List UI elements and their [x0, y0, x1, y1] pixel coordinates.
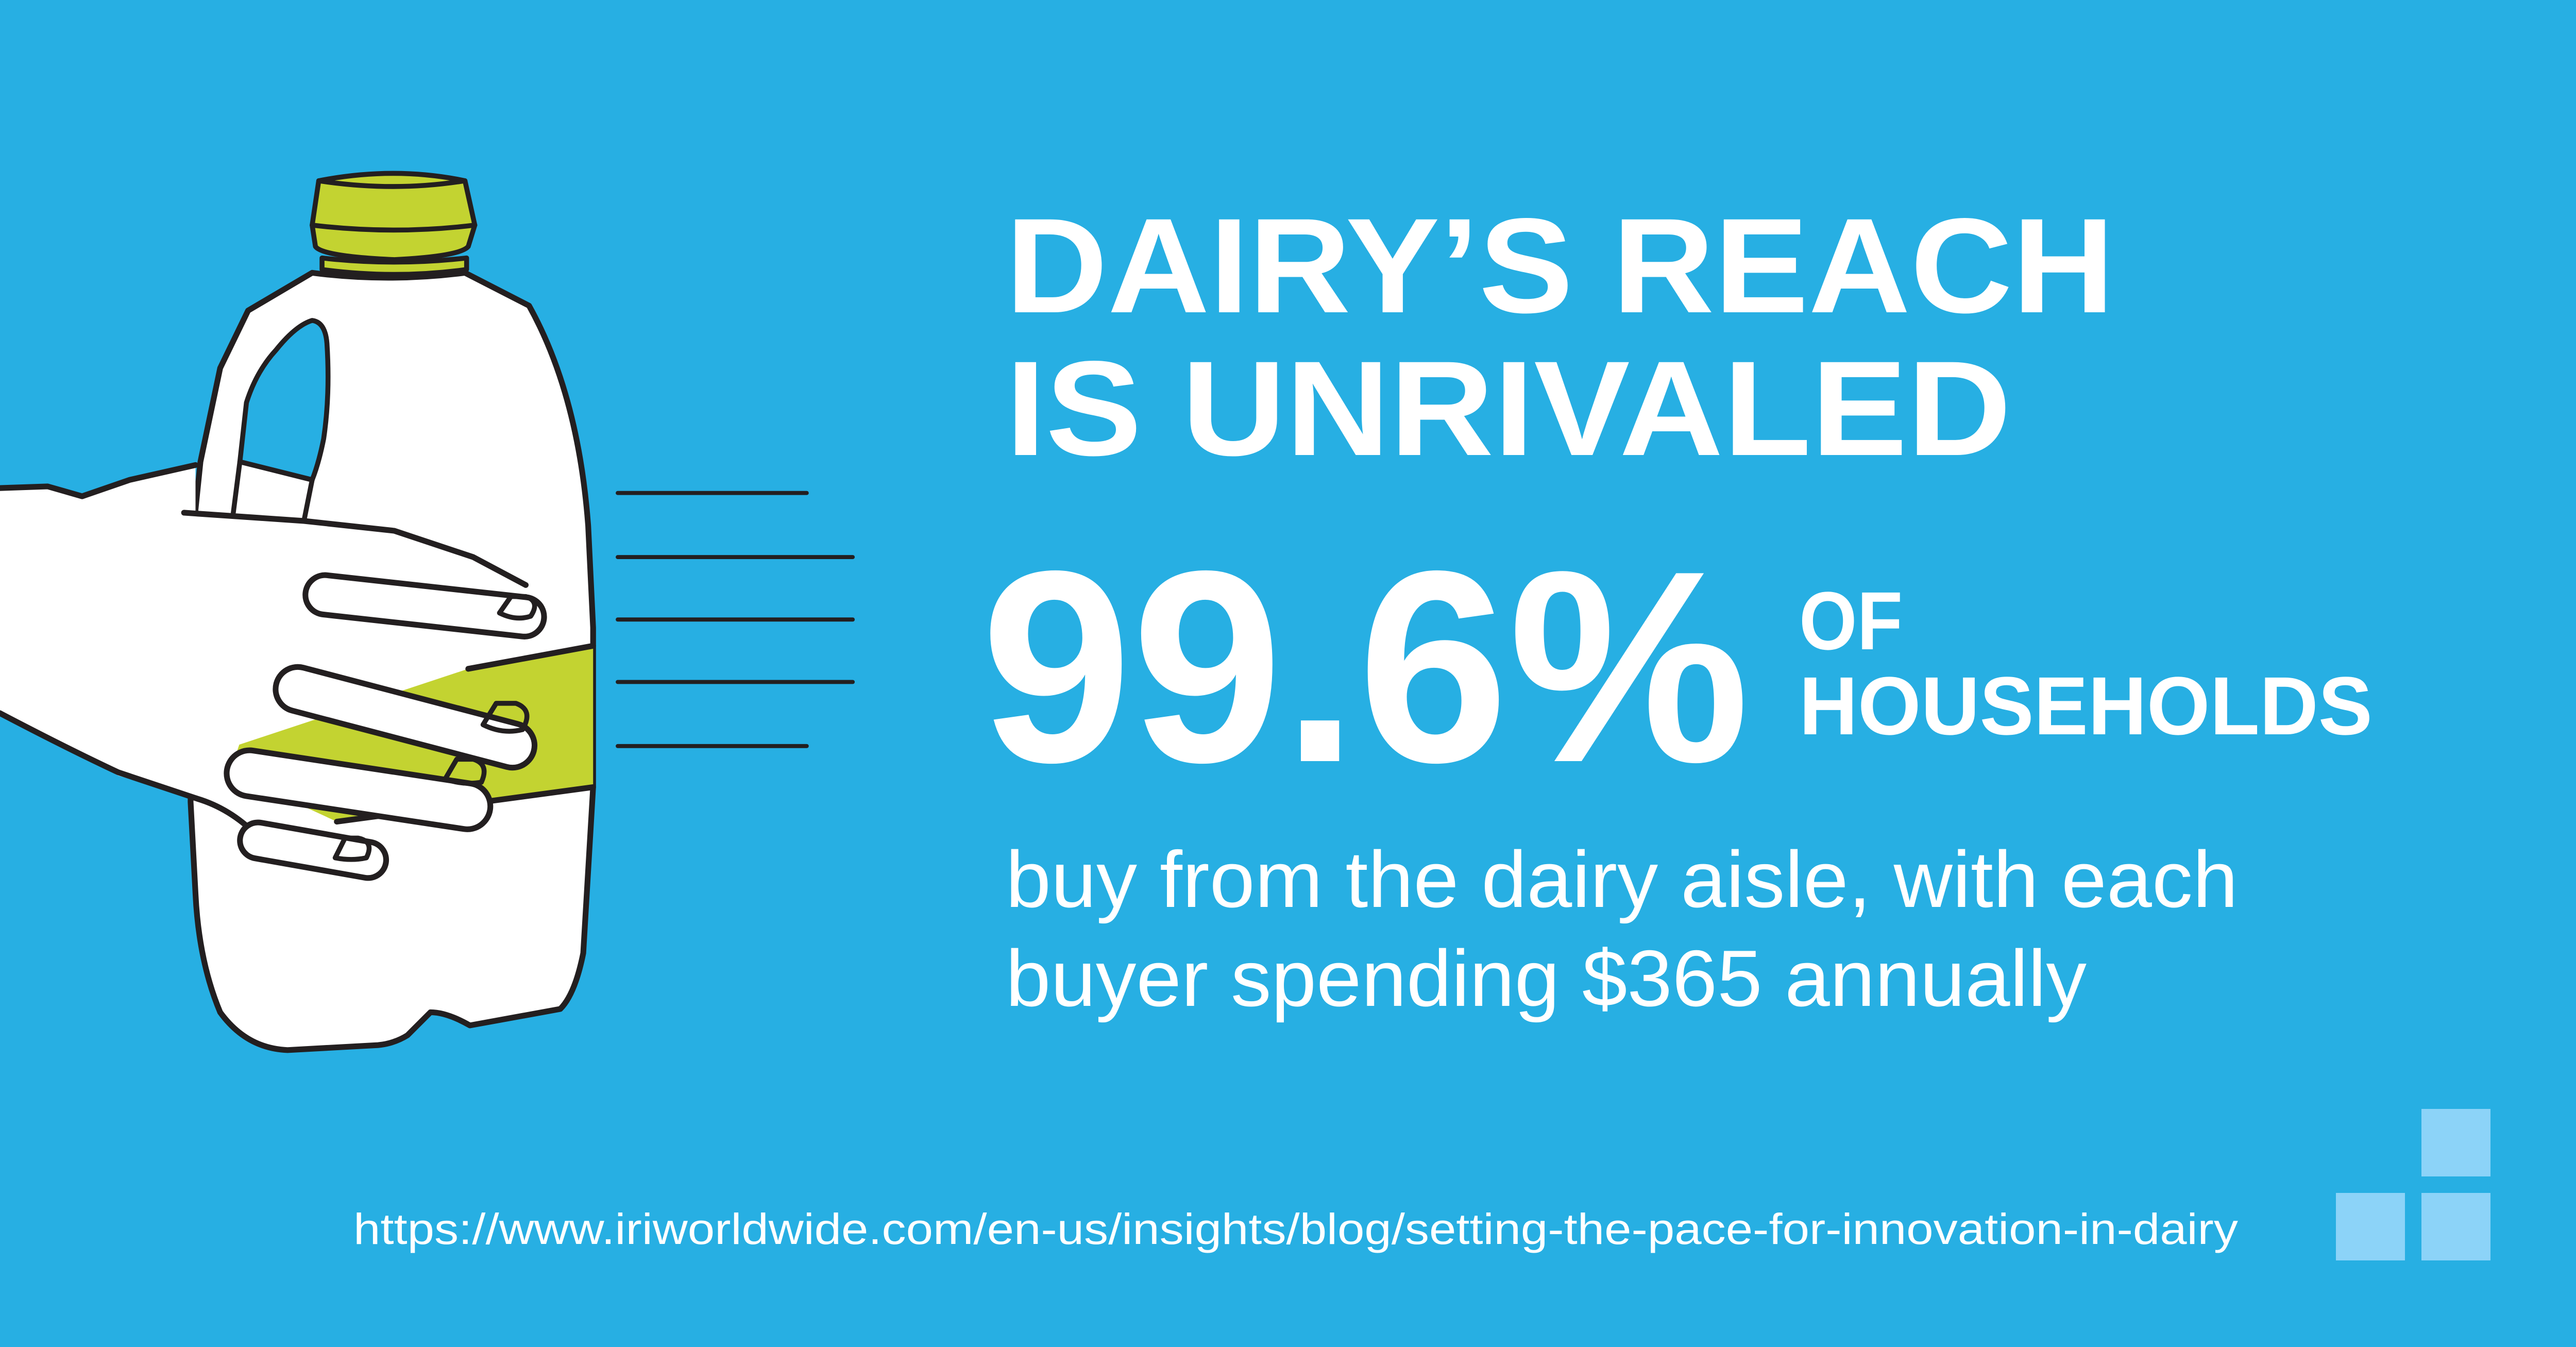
speed lines [618, 493, 853, 746]
body text [1006, 835, 2238, 1023]
body text: buyer spending $365 annually [1006, 934, 2087, 1023]
logo squares [2336, 1109, 2490, 1260]
handle hole [240, 321, 328, 480]
title [1006, 190, 2114, 484]
source url: https://www.iriworldwide.com/en-us/insights/blog/setting-the-pace-for-innovation-in-dairy [353, 1205, 2238, 1253]
pinky finger [237, 819, 389, 881]
bottle cap [312, 173, 475, 275]
hand palm [0, 465, 493, 858]
fingernails [335, 597, 535, 860]
big stat 99.6%: 99.6% [981, 514, 1750, 819]
bottle body [191, 273, 593, 1050]
stat label [1799, 575, 2372, 752]
title: DAIRY’S REACH [1006, 190, 2114, 341]
green label band [230, 646, 593, 822]
stat label: OF [1799, 575, 1903, 667]
title: IS UNRIVALED [1006, 333, 2011, 484]
body text: buy from the dairy aisle, with each [1006, 835, 2238, 924]
index finger [303, 573, 546, 638]
stat label: HOUSEHOLDS [1799, 660, 2372, 752]
illustration: hand holding milk jug [0, 173, 853, 1050]
middle finger [270, 662, 539, 772]
ring finger [224, 747, 494, 832]
